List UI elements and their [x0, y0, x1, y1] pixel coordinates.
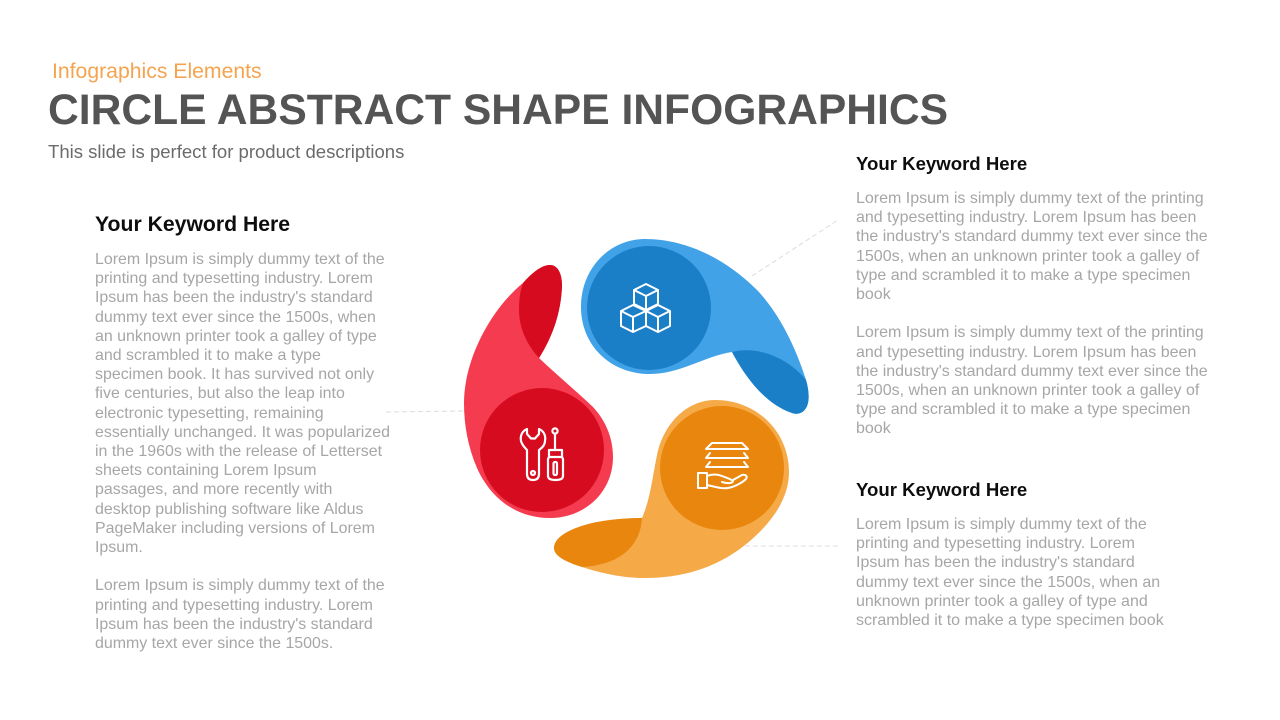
icon: hand with layers	[698, 443, 748, 488]
text block: bottom right description: Lorem Ipsum is simply dummy text of the printing and typesetting industry. Lorem Ipsum has been the industry's standard dummy text ever since the 1500s, when an unknown printer took a galley of type and scrambled it to make a type specimen book	[856, 516, 1164, 629]
title: CIRCLE ABSTRACT SHAPE INFOGRAPHICS	[48, 86, 948, 134]
subtitle: This slide is perfect for product descriptions	[48, 141, 404, 162]
blue drop tip	[732, 350, 809, 414]
text block: left description: Lorem Ipsum is simply dummy text of the printing and typesetting industry. Lorem Ipsum has been the industry's standard dummy text ever since the 1500s, when an unknown printer took a galley of type and scrambled it to make a type specimen book. It has survived not only five centuries, but also the leap into electronic typesetting, remaining essentially unchanged. It was popularized in the 1960s with the release of Letterset sheets containing Lorem Ipsum passages, and more recently with desktop publishing software like Aldus PageMaker including versions of Lorem Ipsum. Lorem Ipsum is simply dummy text of the printing and typesetting industry. Lorem Ipsum has been the industry's standard dummy text ever since the 1500s.	[95, 251, 390, 652]
shape: blue drop	[581, 239, 809, 414]
text block: top right description: Lorem Ipsum is simply dummy text of the printing and typesetting industry. Lorem Ipsum has been the industry's standard dummy text ever since the 1500s, when an unknown printer took a galley of type and scrambled it to make a type specimen book Lorem Ipsum is simply dummy text of the printing and typesetting industry. Lorem Ipsum has been the industry's standard dummy text ever since the 1500s, when an unknown printer took a galley of type and scrambled it to make a type specimen book	[856, 190, 1208, 437]
shape: red drop	[464, 265, 613, 518]
orange drop tip	[554, 518, 642, 567]
icon: cubes	[621, 284, 670, 332]
heading: left keyword: Your Keyword Here	[95, 213, 290, 236]
red drop tip	[519, 265, 562, 358]
blue circle	[587, 246, 711, 370]
heading: bottom right keyword: Your Keyword Here	[856, 479, 1027, 500]
shape: orange drop	[554, 400, 789, 578]
icon: wrench and screwdriver	[521, 428, 563, 480]
orange circle	[660, 406, 784, 530]
heading: top right keyword: Your Keyword Here	[856, 153, 1027, 174]
red circle	[480, 388, 604, 512]
eyebrow label: Infographics Elements	[52, 60, 262, 83]
